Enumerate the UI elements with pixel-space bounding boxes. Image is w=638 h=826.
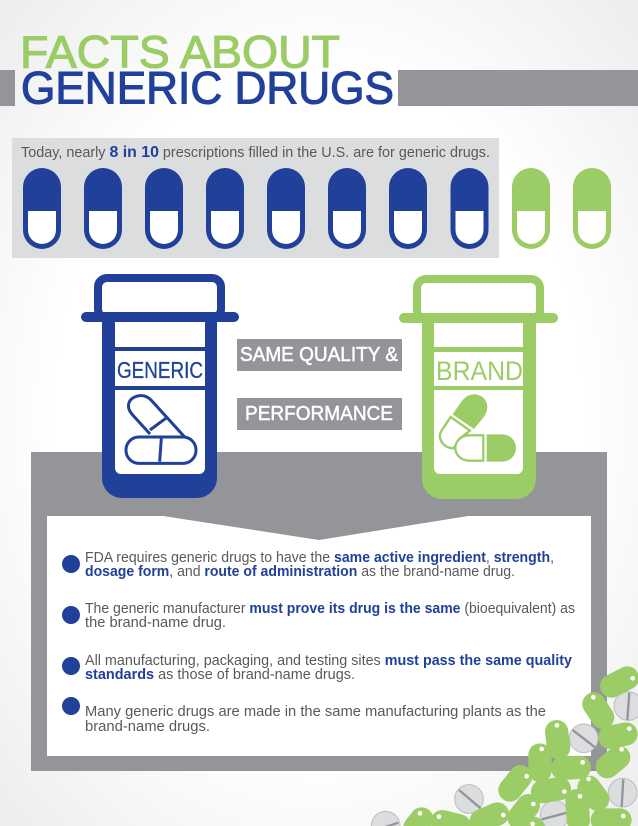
- panel: 8 in 10 prescriptions: [12, 138, 611, 258]
- fact 4: Many generic drugs are made in the same manufacturing plants as the: [85, 704, 546, 720]
- statistic sentence: Today, nearly 8 in 10 prescriptions filled in the U.S. are for generic drugs.: [21, 144, 490, 161]
- label: performance: [237, 398, 402, 430]
- fact 4: brand-name drugs.: [85, 719, 210, 735]
- icon: filled capsules: [440, 394, 516, 462]
- label: same quality and: [237, 339, 402, 371]
- fact 1: [62, 550, 554, 580]
- label: same quality and: SAME QUALITY &: [240, 344, 399, 366]
- title: generic drugs: GENERIC DRUGS: [21, 62, 394, 114]
- fact 2: the brand-name drug.: [85, 615, 226, 631]
- title: facts about: FACTS ABOUT: [20, 26, 340, 78]
- panel: gray backing with white fact box: [31, 452, 607, 771]
- fact 1: FDA requires generic drugs to have the same active ingredient, strength,: [85, 550, 554, 566]
- label: performance: PERFORMANCE: [245, 403, 393, 425]
- illustration: pile of pills: [371, 676, 638, 826]
- fact 3: standards as those of brand-name drugs.: [85, 667, 355, 683]
- fact 3: [62, 653, 573, 683]
- fact 2: The generic manufacturer must prove its drug is the same (bioequivalent) as: [85, 601, 575, 617]
- generic label: GENERIC: [117, 357, 203, 383]
- brand label: BRAND: [436, 356, 523, 386]
- fact 1: dosage form, and route of administration as the brand-name drug.: [85, 564, 515, 580]
- fact 4: [62, 697, 546, 735]
- fact 3: All manufacturing, packaging, and testing sites must pass the same quality: [85, 653, 573, 669]
- icon: generic bottle: [81, 278, 239, 498]
- fact 2: [62, 601, 575, 631]
- icon: outlined capsules: [126, 396, 196, 463]
- title banner: [0, 26, 638, 114]
- icon row: ten capsules: [23, 168, 611, 249]
- icon: brand bottle: [399, 279, 558, 499]
